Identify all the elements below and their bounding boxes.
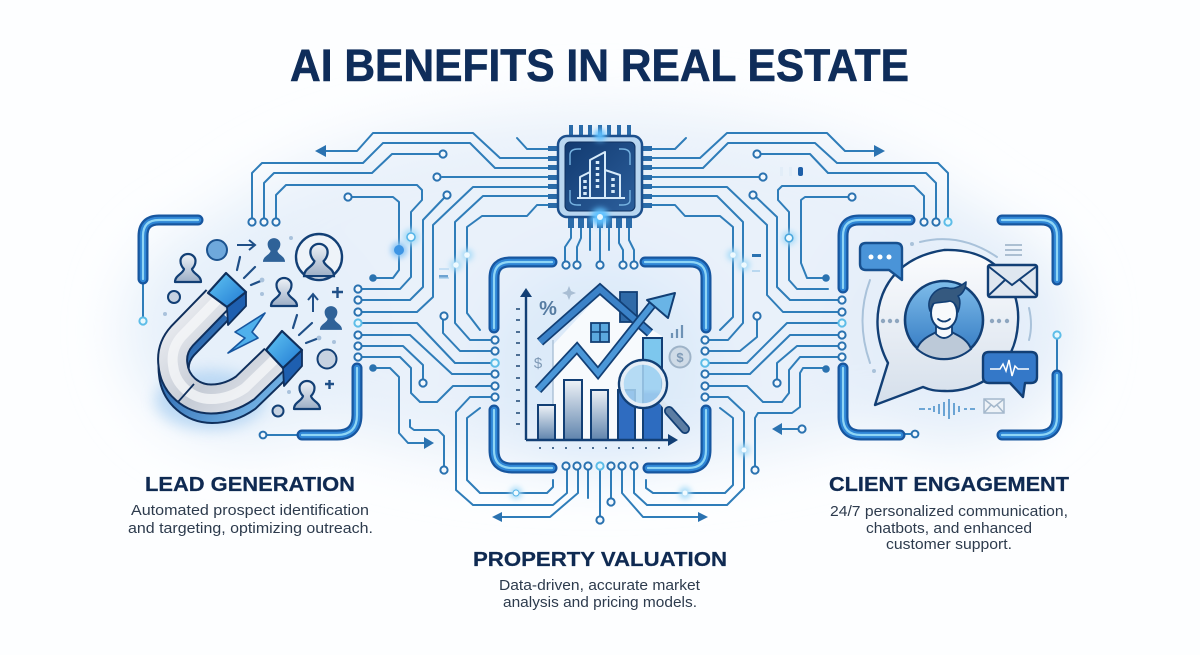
icon: large speech bubble	[875, 250, 1018, 405]
bubble dots	[881, 319, 1009, 323]
description	[128, 502, 373, 537]
text: property valuation	[473, 549, 727, 611]
icon: horseshoe magnet	[155, 273, 302, 430]
icon: small orbs and markers	[163, 236, 343, 416]
chart axes	[516, 288, 678, 448]
description: and targeting, optimizing outreach.	[128, 520, 373, 537]
panel: property valuation	[494, 262, 706, 468]
center traces	[565, 227, 634, 516]
icon: avatar circle	[296, 234, 342, 280]
description: chatbots, and enhanced	[866, 520, 1032, 537]
frame brackets	[143, 220, 357, 435]
text: client engagement	[829, 474, 1069, 553]
icon: prospect sparks	[237, 257, 319, 343]
left traces	[143, 133, 578, 517]
chip corner brackets	[570, 149, 630, 205]
title: AI BENEFITS IN REAL ESTATE	[290, 40, 909, 91]
icon: magnifying glass	[619, 360, 685, 429]
icon: rising trend arrow	[538, 293, 675, 390]
icon: prospect people	[175, 238, 342, 409]
icon: lightning bolt	[228, 313, 265, 353]
trace arrowheads	[315, 145, 885, 522]
chart symbols: percent, dollar, coin: $	[676, 350, 684, 365]
description: 24/7 personalized communication,	[830, 503, 1068, 520]
glowing nodes	[391, 167, 803, 499]
heading: CLIENT ENGAGEMENT	[829, 474, 1069, 496]
icon: waveform chat bubble	[983, 352, 1037, 397]
pin rings	[248, 150, 940, 524]
description: Data-driven, accurate market	[499, 577, 701, 594]
decorative arcs	[862, 239, 1031, 372]
light pin rings	[139, 218, 1061, 470]
chip body	[558, 136, 642, 217]
icon: sound wave	[919, 399, 975, 419]
description	[499, 577, 701, 611]
frame brackets	[843, 220, 1057, 435]
central chip with building	[548, 125, 652, 228]
panel: lead generation	[143, 220, 357, 435]
heading: PROPERTY VALUATION	[473, 549, 727, 571]
frame brackets	[494, 262, 706, 468]
icon: small envelope	[984, 399, 1004, 413]
chart symbols: percent, dollar, coin: %	[539, 298, 557, 320]
panel: client engagement	[843, 220, 1057, 435]
chart symbols: percent, dollar, coin	[534, 286, 690, 372]
description: analysis and pricing models.	[503, 594, 697, 611]
icon: building	[577, 152, 625, 198]
icon: agent avatar	[905, 281, 983, 359]
icon: chat bubble with dots	[860, 243, 902, 280]
chart symbols: percent, dollar, coin: $	[534, 355, 543, 372]
circuit traces	[139, 133, 1061, 524]
chip pins	[548, 125, 652, 228]
description: Automated prospect identification	[131, 502, 369, 519]
description: customer support.	[886, 536, 1012, 553]
text: lead generation	[128, 474, 373, 537]
icon: envelope	[988, 245, 1037, 297]
chip glow	[591, 129, 609, 226]
right traces	[622, 133, 1057, 517]
solid terminal dots	[369, 274, 830, 373]
chip die	[565, 142, 635, 211]
description	[830, 503, 1068, 553]
heading: LEAD GENERATION	[145, 474, 355, 496]
icon: house	[540, 289, 662, 440]
bar chart	[538, 338, 662, 440]
soft background glows	[125, 110, 1075, 470]
